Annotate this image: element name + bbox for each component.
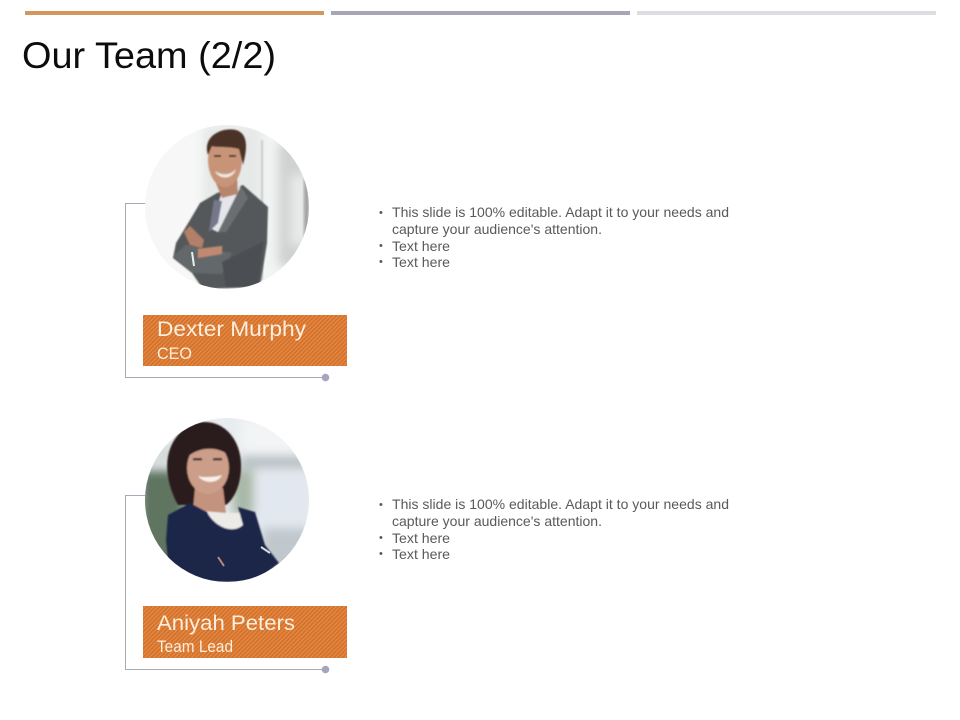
bullet text: Text here: [392, 546, 450, 562]
name banner: CEO: [157, 344, 192, 363]
bullet text: capture your audience's attention.: [392, 221, 602, 237]
bullet text: [379, 204, 729, 270]
bullet text: •: [379, 499, 383, 511]
bullet text: Text here: [392, 530, 450, 546]
photo: woman in navy top: [140, 418, 310, 582]
bullet text: •: [379, 256, 383, 268]
bullet text: This slide is 100% editable. Adapt it to your needs and: [392, 204, 729, 220]
title: Our Team (2/2): [22, 35, 276, 76]
top accent bars: [25, 11, 936, 15]
name banner: Team Lead: [157, 637, 233, 656]
bullet text: [379, 496, 729, 562]
bullet text: capture your audience's attention.: [392, 513, 602, 529]
name banner: Dexter Murphy: [157, 318, 307, 341]
name banner: [143, 315, 347, 366]
name banner: Aniyah Peters: [157, 612, 295, 635]
bullet text: •: [379, 548, 383, 560]
photo: man in grey suit: [145, 125, 310, 289]
team member: Aniyah Peters: [126, 418, 729, 673]
name banner: [143, 606, 347, 658]
bullet text: •: [379, 532, 383, 544]
connector line with dot: [126, 204, 329, 381]
connector line with dot: [126, 496, 329, 673]
bullet text: This slide is 100% editable. Adapt it to your needs and: [392, 496, 729, 512]
bullet text: Text here: [392, 238, 450, 254]
bullet text: •: [379, 240, 383, 252]
team member: Dexter Murphy: [126, 125, 729, 381]
bullet text: •: [379, 207, 383, 219]
bullet text: Text here: [392, 254, 450, 270]
